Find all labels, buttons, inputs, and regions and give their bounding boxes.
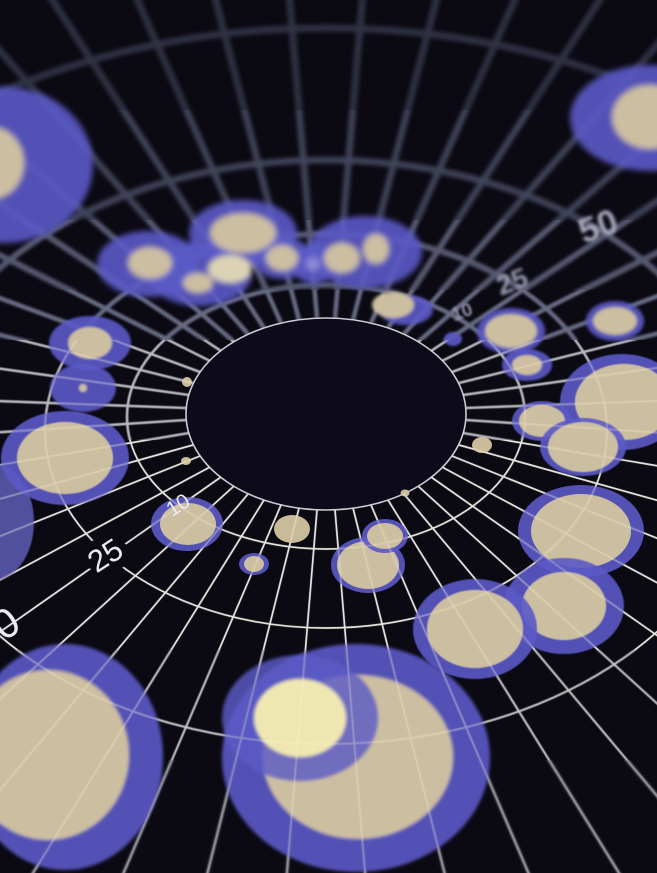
dots: small — [181, 377, 410, 496]
scale label: 25 upper right: 25 — [492, 262, 532, 301]
bubble: lower centre 1 — [362, 519, 408, 553]
bubble: lower centre 2 — [331, 537, 405, 593]
bubble: right medium — [512, 401, 572, 441]
inner dark disc — [186, 318, 466, 510]
bubble: far left partial — [0, 462, 34, 582]
bubble cluster: top — [97, 200, 422, 306]
light grid lines showing through bubbles — [0, 340, 657, 873]
bubble: small bottom — [239, 553, 269, 575]
bubble: right large — [560, 354, 657, 450]
bubble: small blue — [444, 332, 462, 346]
bubble: right medium 2 — [540, 418, 626, 476]
scale label: 50 upper right: 50 — [573, 201, 623, 251]
bubble: left 1 — [49, 316, 131, 370]
bubble: top-right large — [570, 65, 657, 171]
bubble: lower right 1 — [518, 485, 644, 577]
bubble: lower right 2 — [504, 558, 624, 654]
bubble: upper centre — [372, 292, 433, 325]
bubble: right 3 — [502, 349, 552, 381]
dot: right — [472, 437, 492, 453]
bubble: bottom-centre overlapping — [222, 655, 378, 781]
bubble: lower right 3 — [413, 579, 537, 679]
bubble: left 3 — [1, 411, 129, 505]
bubble: top-left huge — [0, 87, 93, 243]
scale label: 10 lower left: 10 — [162, 489, 194, 521]
scale label: 10 upper right: 10 — [449, 299, 476, 326]
bubble: lower-left labelled — [151, 497, 223, 551]
bubble: right 1 — [477, 308, 545, 354]
bubble: bottom-left huge — [0, 644, 163, 870]
bubble: left 2 — [50, 364, 116, 412]
bubble: bottom-centre huge — [222, 644, 490, 872]
bubble: right 2 — [586, 301, 644, 341]
scale label: 25 lower left: 25 — [81, 531, 129, 579]
dot: bottom — [274, 515, 310, 543]
